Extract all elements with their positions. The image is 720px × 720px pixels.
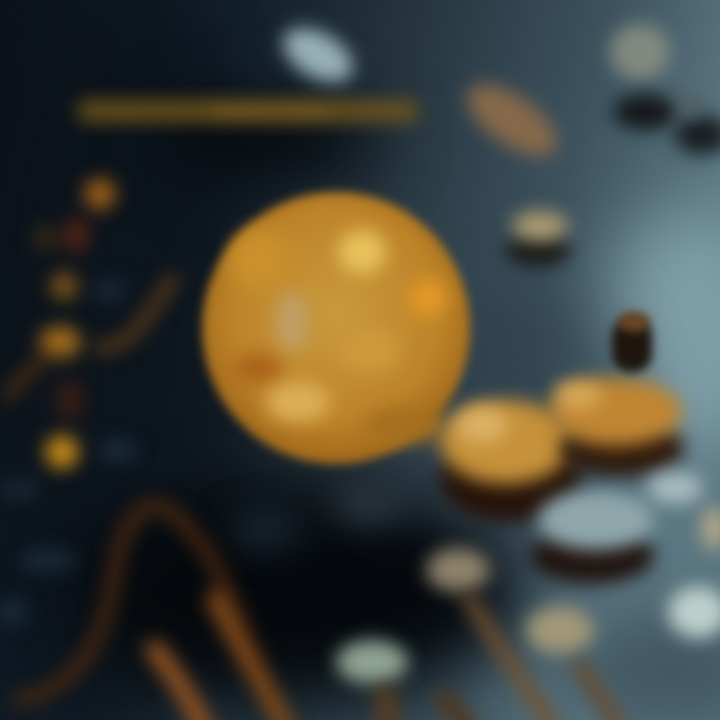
silver coin: lower right (530, 472, 720, 638)
large gold coin (202, 192, 470, 464)
line chart: left amber markers (0, 178, 175, 626)
floating coins: top right (610, 24, 720, 155)
gold coin: lower centre (440, 400, 580, 522)
floating coin: top silver (274, 17, 362, 93)
chart lines: bottom copper curves (20, 506, 620, 720)
coin stack: dark block below large coin (229, 494, 404, 546)
floating coin: small centre right (506, 211, 570, 266)
gold coin: right with dark peg (550, 312, 684, 476)
heading: blurred golden title bar (78, 100, 418, 122)
floating coin: top copper (456, 71, 568, 169)
small coins: bottom row (336, 548, 594, 684)
